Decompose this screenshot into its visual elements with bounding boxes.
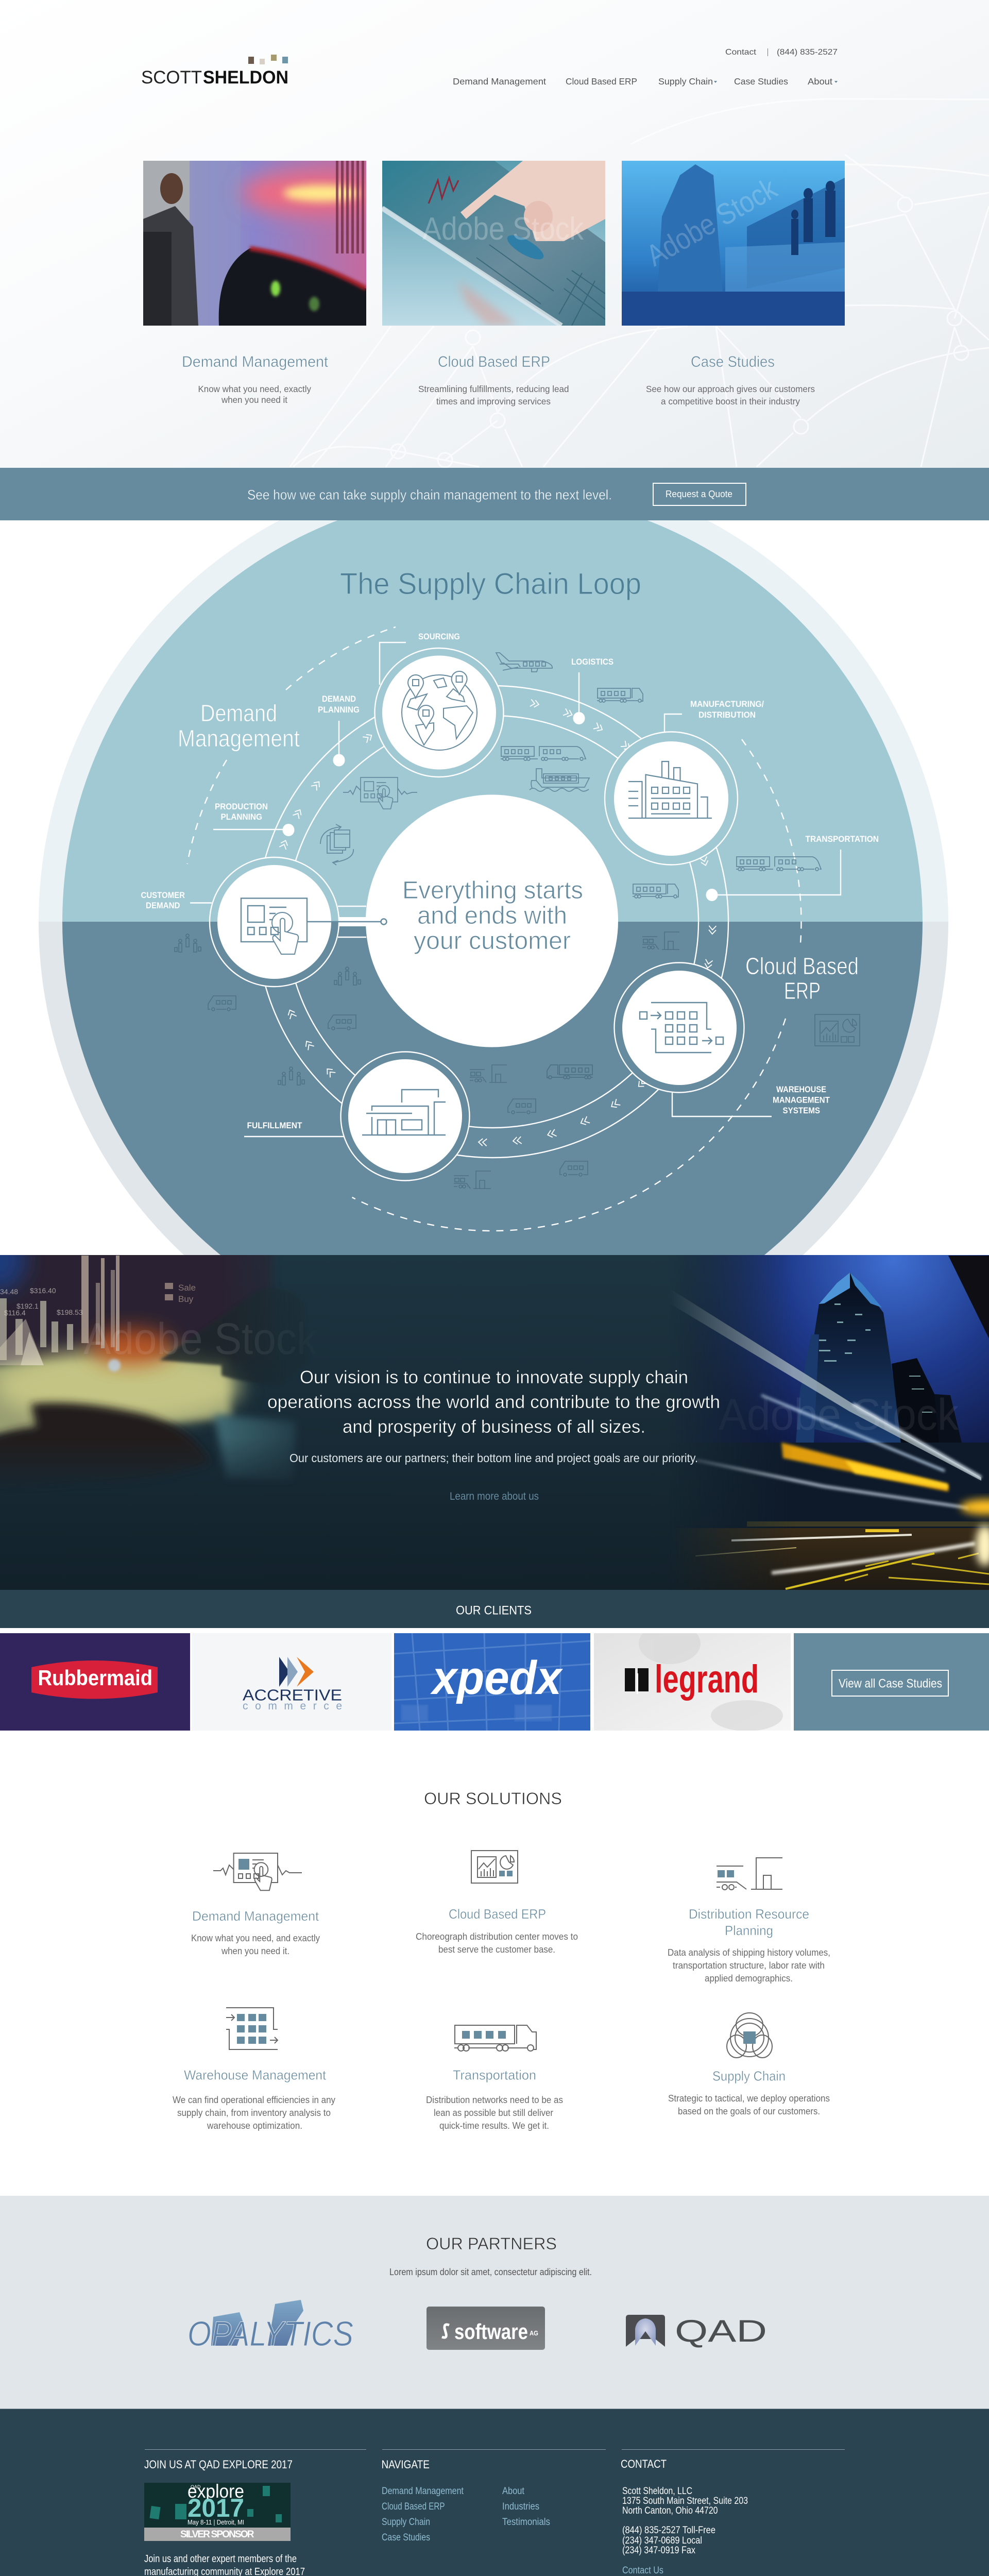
node: sourcing bbox=[375, 648, 504, 777]
icons: light-zone vehicles bbox=[501, 688, 821, 898]
explore banner: explore bbox=[187, 2481, 244, 2502]
label: sourcing: SOURCING bbox=[418, 632, 460, 641]
navigation bbox=[453, 76, 838, 87]
footer column: explore: JOIN US AT QAD EXPLORE 2017 bbox=[144, 2458, 293, 2471]
photo: demand management bbox=[143, 161, 376, 326]
solution: demand management bbox=[191, 1853, 320, 1956]
feature: case studies bbox=[646, 353, 815, 406]
left photo: tablet and hands: $192.1 bbox=[16, 1302, 39, 1310]
solution: distribution resource planning: Distribution Resource bbox=[689, 1906, 809, 1922]
loop road bbox=[257, 686, 728, 1158]
footer column: navigate: Supply Chain bbox=[382, 2517, 430, 2528]
road direction chevrons bbox=[279, 699, 716, 1146]
label: production planning: PLANNING bbox=[220, 812, 262, 822]
vision statement: Our customers are our partners; their bottom line and project goals are our priority. bbox=[289, 1451, 698, 1465]
button: request a quote: Request a Quote bbox=[666, 489, 732, 499]
logo: Software AG bbox=[427, 2307, 545, 2350]
left photo: tablet and hands: Sale bbox=[178, 1283, 196, 1293]
panel: our partners: Lorem ipsum dolor sit amet, consectetur adipiscing elit. bbox=[389, 2267, 592, 2277]
navigation: About bbox=[808, 76, 832, 87]
feature: cloud based ERP: times and improving services bbox=[436, 396, 551, 406]
client: xpedx: xpedx bbox=[430, 1652, 564, 1704]
logo: QAD: QAD bbox=[675, 2314, 767, 2348]
explore banner: SILVER SPONSOR bbox=[180, 2529, 254, 2540]
icon: demand sensing bbox=[343, 777, 417, 809]
label: production planning bbox=[215, 802, 268, 822]
icon: globe with pins bbox=[402, 671, 477, 750]
solution: cloud based ERP: Cloud Based ERP bbox=[449, 1906, 546, 1922]
footer column: contact: (844) 835-2527 Toll-Free bbox=[622, 2525, 715, 2536]
solution: demand management: Demand Management bbox=[192, 1908, 319, 1924]
icon: plane bbox=[496, 653, 552, 672]
link: learn more about us: Learn more about us bbox=[450, 1490, 539, 1502]
solution: transportation: lean as possible but still deliver bbox=[434, 2108, 553, 2118]
label: manufacturing distribution: MANUFACTURING/ bbox=[690, 700, 764, 709]
footer column: contact: (234) 347-0919 Fax bbox=[622, 2545, 695, 2556]
footer column: navigate: Industries bbox=[502, 2501, 539, 2512]
left photo: tablet and hands: $116.4 bbox=[4, 1309, 26, 1317]
icon: dock bbox=[717, 1858, 782, 1890]
heading: our solutions: OUR SOLUTIONS bbox=[424, 1789, 562, 1808]
solution: warehouse management: warehouse optimization. bbox=[207, 2121, 302, 2131]
client: Rubbermaid: Rubbermaid bbox=[38, 1666, 152, 1690]
clients heading band bbox=[0, 1590, 989, 1628]
footer column: explore: Join us and other expert members of the bbox=[144, 2553, 297, 2565]
central circle bbox=[330, 794, 618, 1047]
feature: demand management: Demand Management bbox=[182, 353, 329, 370]
label: demand planning: DEMAND bbox=[322, 694, 356, 704]
central circle: your customer bbox=[414, 927, 571, 955]
logo: QAD bbox=[626, 2314, 767, 2348]
node: customer demand bbox=[210, 857, 386, 987]
footer column: navigate: NAVIGATE bbox=[381, 2458, 430, 2471]
feature: demand management: when you need it bbox=[221, 395, 287, 405]
left photo: tablet and hands bbox=[0, 1229, 318, 1494]
logo: Software AG: software bbox=[454, 2319, 528, 2344]
solution: distribution resource planning: Planning bbox=[725, 1923, 773, 1938]
footer column: contact: (234) 347-0689 Local bbox=[622, 2535, 702, 2546]
label: manufacturing distribution: DISTRIBUTION bbox=[698, 710, 756, 720]
solution: transportation bbox=[426, 2025, 563, 2131]
vision statement: operations across the world and contribute to the growth bbox=[267, 1392, 720, 1412]
footer bbox=[0, 2409, 989, 2576]
explore banner: QAD bbox=[191, 2484, 201, 2489]
solution: warehouse management: Warehouse Management bbox=[184, 2067, 327, 2082]
icon: touch panel bbox=[213, 1853, 302, 1890]
explore banner: May 8-11 | Detroit, MI bbox=[187, 2518, 244, 2526]
node: fulfillment bbox=[341, 1052, 470, 1181]
icon: left-facing truck bbox=[547, 1065, 593, 1079]
icons: vans bbox=[208, 996, 588, 1176]
footer column: contact: Contact Us bbox=[622, 2565, 663, 2576]
icon: ship bbox=[530, 769, 589, 791]
central circle: and ends with bbox=[417, 902, 567, 929]
footer column: explore bbox=[144, 2458, 305, 2576]
solution: warehouse management bbox=[173, 2008, 335, 2131]
solution: supply chain bbox=[668, 2013, 830, 2116]
label: warehouse management systems bbox=[773, 1085, 830, 1115]
left photo: tablet and hands: 34.48 bbox=[0, 1287, 18, 1296]
client: Accretive Commerce: ACCRETIVE bbox=[243, 1686, 342, 1704]
logo: Opalytics: OPALYTICS bbox=[187, 2314, 353, 2353]
icon: linked circles bbox=[727, 2013, 772, 2058]
connector lines bbox=[190, 642, 841, 1137]
icons: people bbox=[175, 934, 361, 1085]
icon: dashboard bbox=[471, 1851, 518, 1883]
feature: case studies: See how our approach gives our customers bbox=[646, 384, 815, 394]
logo bbox=[141, 55, 288, 88]
footer column: navigate bbox=[381, 2458, 550, 2543]
photo: case studies bbox=[622, 161, 845, 326]
solution: distribution resource planning: Data analysis of shipping history volumes, bbox=[668, 1947, 830, 1958]
explore banner: 2017 bbox=[187, 2494, 244, 2522]
photo: case studies: Adobe Stock bbox=[641, 172, 783, 273]
navigation: Case Studies bbox=[734, 76, 788, 87]
label: manufacturing distribution bbox=[690, 700, 764, 720]
panel: our partners: OUR PARTNERS bbox=[426, 2234, 557, 2253]
client: Accretive Commerce bbox=[192, 1633, 391, 1731]
panel: vision hero photo bbox=[0, 1229, 989, 1590]
solution: distribution resource planning: applied demographics. bbox=[705, 1973, 793, 1984]
feature: case studies: Case Studies bbox=[691, 353, 775, 370]
feature: cloud based ERP: Streamlining fulfillments, reducing lead bbox=[418, 384, 569, 394]
logo: Software AG: AG bbox=[530, 2329, 538, 2337]
footer column: contact: Scott Sheldon, LLC bbox=[622, 2486, 692, 2497]
label: demand planning bbox=[318, 694, 360, 715]
node: warehouse bbox=[614, 962, 744, 1092]
photo: cloud based ERP bbox=[382, 161, 605, 326]
icon: dashboard bbox=[815, 1014, 860, 1046]
vision statement bbox=[267, 1367, 720, 1465]
label: warehouse management systems: MANAGEMENT bbox=[773, 1095, 830, 1105]
heading: cloud based ERP: Cloud Based bbox=[745, 953, 859, 979]
left photo: tablet and hands: $198.53 bbox=[57, 1308, 83, 1316]
icon: storefront bbox=[362, 1090, 446, 1135]
panel: supply chain loop diagram bbox=[39, 520, 948, 1255]
solution: supply chain: Strategic to tactical, we deploy operations bbox=[668, 2093, 830, 2104]
solution: warehouse management: supply chain, from inventory analysis to bbox=[177, 2108, 331, 2118]
footer column: contact: 1375 South Main Street, Suite 203 bbox=[622, 2496, 748, 2506]
icon: warehouse bbox=[226, 2008, 278, 2049]
heading: demand management bbox=[178, 700, 300, 752]
solution: demand management: when you need it. bbox=[221, 1946, 289, 1956]
icon: touch dashboard bbox=[241, 899, 307, 954]
navigation: Cloud Based ERP bbox=[566, 76, 637, 87]
connector dots bbox=[282, 712, 718, 901]
label: warehouse management systems: SYSTEMS bbox=[783, 1106, 820, 1115]
solution: distribution resource planning: transportation structure, labor rate with bbox=[673, 1960, 825, 1971]
vision statement: and prosperity of business of all sizes. bbox=[343, 1417, 645, 1437]
top contact line bbox=[725, 48, 838, 57]
footer column: contact: CONTACT bbox=[621, 2458, 667, 2470]
solution: cloud based ERP bbox=[416, 1851, 578, 1955]
solution: transportation: Distribution networks need to be as bbox=[426, 2095, 563, 2105]
solution: supply chain: Supply Chain bbox=[712, 2068, 786, 2083]
left photo: tablet and hands: $316.40 bbox=[30, 1286, 56, 1295]
call to action band bbox=[0, 468, 989, 520]
top contact line: Contact bbox=[725, 48, 757, 57]
heading: demand management: Demand bbox=[200, 700, 277, 726]
solution: supply chain: based on the goals of our customers. bbox=[678, 2106, 820, 2116]
label: fulfillment: FULFILLMENT bbox=[247, 1121, 302, 1130]
clients heading band: OUR CLIENTS bbox=[456, 1603, 532, 1618]
button: request a quote bbox=[653, 483, 746, 505]
feature: demand management bbox=[182, 353, 329, 405]
navigation: Demand Management bbox=[453, 76, 546, 87]
icon: warehouse flow bbox=[640, 1003, 723, 1053]
footer column: navigate: About bbox=[502, 2486, 525, 2497]
icons: docks bbox=[454, 932, 679, 1189]
heading: demand management: Management bbox=[178, 725, 300, 752]
top contact line: (844) 835-2527 bbox=[777, 48, 838, 57]
feature: cloud based ERP bbox=[418, 353, 569, 406]
dashed outer arcs bbox=[187, 627, 801, 1231]
label: customer demand bbox=[141, 891, 185, 910]
label: customer demand: DEMAND bbox=[146, 901, 180, 910]
label: transportation: TRANSPORTATION bbox=[806, 835, 879, 844]
logo: SHELDON bbox=[203, 67, 288, 88]
explore banner bbox=[144, 2481, 291, 2541]
label: production planning: PRODUCTION bbox=[215, 802, 268, 811]
footer column: contact bbox=[621, 2458, 748, 2576]
outer ring and loop disc bbox=[39, 467, 948, 1377]
icon: planning cycle bbox=[320, 824, 353, 865]
icon: factory bbox=[628, 761, 712, 818]
footer column: navigate: Cloud Based ERP bbox=[382, 2501, 445, 2512]
footer column: navigate: Demand Management bbox=[382, 2486, 464, 2497]
footer column: navigate: Testimonials bbox=[502, 2517, 550, 2528]
label: warehouse management systems: WAREHOUSE bbox=[776, 1085, 826, 1094]
solution: distribution resource planning bbox=[668, 1858, 830, 1984]
solution: cloud based ERP: best serve the customer base. bbox=[438, 1944, 555, 1955]
central circle: Everything starts bbox=[402, 877, 583, 904]
node: manufacturing bbox=[605, 732, 738, 865]
photo: cloud based ERP: Adobe Stock bbox=[422, 211, 584, 247]
client: legrand: legrand bbox=[655, 1657, 759, 1701]
label: customer demand: CUSTOMER bbox=[141, 891, 185, 900]
client: Accretive Commerce: commerce bbox=[243, 1700, 342, 1712]
panel: our partners bbox=[0, 2196, 989, 2409]
footer column: contact: North Canton, Ohio 44720 bbox=[622, 2505, 718, 2516]
client: legrand bbox=[594, 1623, 791, 1731]
logo: SCOTT bbox=[141, 67, 202, 88]
feature: case studies: a competitive boost in their industry bbox=[661, 396, 800, 406]
client: Rubbermaid bbox=[0, 1633, 190, 1731]
call to action band: See how we can take supply chain management to the next level. bbox=[247, 487, 612, 503]
solution: transportation: quick-time results. We get it. bbox=[439, 2121, 549, 2131]
solution: demand management: Know what you need, and exactly bbox=[191, 1933, 320, 1943]
feature: cloud based ERP: Cloud Based ERP bbox=[438, 353, 550, 370]
left photo: tablet and hands: Adobe Stock bbox=[83, 1314, 318, 1364]
solution: cloud based ERP: Choreograph distribution center moves to bbox=[416, 1931, 578, 1942]
heading: cloud based ERP: ERP bbox=[784, 977, 821, 1004]
tile: view all case studies: View all Case Studies bbox=[839, 1676, 942, 1691]
feature: demand management: Know what you need, exactly bbox=[198, 384, 311, 394]
right photo: city at night: Adobe Stock bbox=[719, 1390, 959, 1439]
left photo: tablet and hands: Buy bbox=[178, 1294, 194, 1304]
solution: warehouse management: We can find operational efficiencies in any bbox=[173, 2095, 335, 2105]
vision statement: Our vision is to continue to innovate supply chain bbox=[300, 1367, 688, 1387]
label: demand planning: PLANNING bbox=[318, 705, 360, 715]
footer column: navigate: Case Studies bbox=[382, 2532, 430, 2543]
tile: view all case studies bbox=[794, 1633, 989, 1731]
solution: transportation: Transportation bbox=[453, 2067, 536, 2082]
navigation: Supply Chain bbox=[658, 76, 713, 87]
logo: Opalytics bbox=[187, 2300, 353, 2353]
icon: truck bbox=[454, 2025, 536, 2051]
label: logistics: LOGISTICS bbox=[571, 657, 613, 667]
title: The Supply Chain Loop bbox=[340, 567, 641, 601]
hero background: network header bbox=[0, 0, 989, 468]
client: xpedx bbox=[394, 1633, 590, 1731]
heading: cloud based ERP bbox=[745, 953, 859, 1004]
right photo: city at night bbox=[659, 1255, 989, 1590]
